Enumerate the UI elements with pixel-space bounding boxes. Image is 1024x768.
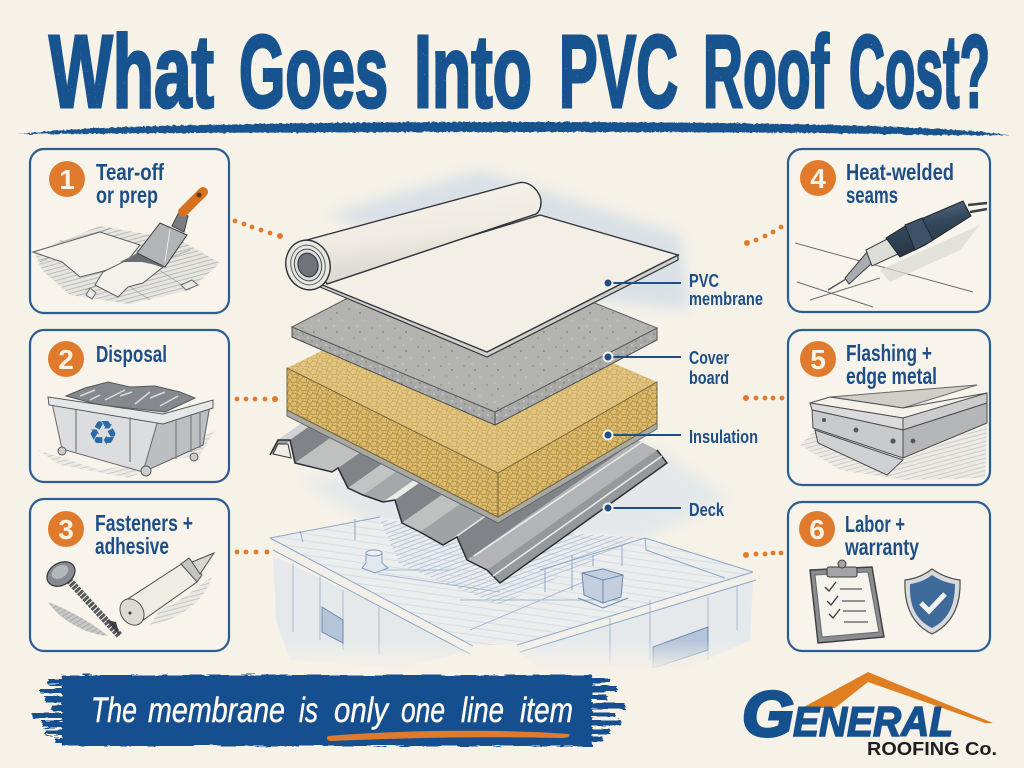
title bbox=[49, 14, 990, 129]
badge 6 bbox=[799, 511, 835, 547]
banner text: one bbox=[401, 691, 445, 730]
heading: Fasteners + bbox=[95, 510, 193, 536]
rooftop vent bbox=[362, 550, 388, 573]
heading: Disposal bbox=[96, 341, 167, 367]
banner text: only bbox=[334, 691, 390, 730]
heading bbox=[95, 510, 193, 559]
banner: key takeaway bbox=[32, 675, 625, 746]
heading bbox=[846, 340, 937, 389]
icon: heat welding gun bbox=[795, 201, 987, 307]
banner text: line bbox=[461, 691, 504, 730]
badge 5 bbox=[800, 341, 836, 377]
badge 2 bbox=[48, 341, 84, 377]
icon: edge metal flashing bbox=[800, 385, 987, 480]
connector dots: card 1 bbox=[233, 219, 283, 239]
orange underline bbox=[327, 731, 569, 741]
logo wordmark: ENERAL bbox=[793, 698, 953, 745]
banner text: membrane bbox=[148, 691, 285, 730]
rooftop building sketch bbox=[260, 517, 770, 672]
panel: 3 fasteners + adhesive bbox=[30, 499, 229, 651]
heading: edge metal bbox=[846, 363, 937, 389]
blue background haze bbox=[300, 170, 730, 540]
callout: PVC membrane: membrane bbox=[689, 288, 763, 309]
title: PVC bbox=[559, 14, 678, 129]
badge 2: 2 bbox=[58, 344, 74, 375]
connector dots: card 5 bbox=[743, 395, 784, 401]
banner text bbox=[91, 691, 573, 730]
heading: Heat-welded bbox=[846, 159, 954, 185]
heading bbox=[844, 511, 919, 560]
title: Roof bbox=[703, 14, 829, 129]
callout: PVC membrane: PVC bbox=[689, 270, 719, 291]
connector dots: card 2 bbox=[235, 396, 278, 402]
heading: adhesive bbox=[95, 533, 169, 559]
logo wordmark: ROOFING Co. bbox=[867, 739, 997, 759]
heading: Labor + bbox=[845, 511, 905, 537]
heading: warranty bbox=[844, 534, 919, 560]
heading bbox=[846, 159, 954, 208]
title: Goes bbox=[239, 14, 388, 129]
icon: dumpster with recycling symbol bbox=[38, 382, 215, 478]
callout: cover board bbox=[604, 347, 729, 388]
logo wordmark: G bbox=[742, 678, 794, 750]
icon: scraper on torn membrane bbox=[33, 192, 220, 304]
icon: dumpster with recycling symbol: ♻ bbox=[88, 414, 118, 454]
panel: 6 labor + warranty bbox=[788, 502, 990, 651]
layer: metal deck bbox=[270, 320, 667, 583]
title: Into bbox=[414, 14, 532, 129]
panel: central roof layer illustration bbox=[260, 170, 770, 672]
panel: 1 tear-off or prep bbox=[30, 149, 229, 313]
panel: 5 flashing + edge metal bbox=[788, 330, 990, 485]
title underline brush stroke bbox=[18, 122, 1010, 135]
badge 3: 3 bbox=[58, 514, 74, 545]
icon: screw and adhesive tube bbox=[42, 553, 214, 636]
badge 4: 4 bbox=[810, 163, 826, 194]
logo: General Roofing Co. bbox=[742, 672, 997, 759]
heading: Flashing + bbox=[846, 340, 932, 366]
heading: or prep bbox=[96, 182, 158, 208]
callout: cover board: Cover bbox=[689, 347, 729, 368]
rooftop HVAC unit bbox=[578, 569, 628, 608]
banner text: The bbox=[91, 691, 137, 730]
heading bbox=[96, 159, 164, 208]
heading: Tear-off bbox=[96, 159, 164, 185]
callout: cover board: board bbox=[689, 367, 729, 388]
callout: PVC membrane bbox=[604, 270, 763, 309]
callout: deck: Deck bbox=[689, 499, 725, 520]
banner text: is bbox=[299, 691, 318, 730]
logo wordmark bbox=[742, 678, 997, 759]
icon: clipboard checklist bbox=[810, 560, 884, 643]
heading: seams bbox=[846, 182, 898, 208]
connector dots: card 4 bbox=[744, 225, 783, 246]
panel: 4 heat-welded seams bbox=[788, 149, 990, 312]
rooftop windows bbox=[322, 607, 708, 668]
icon: warranty shield bbox=[905, 569, 960, 634]
panel: 2 disposal bbox=[30, 330, 229, 482]
badge 6: 6 bbox=[809, 514, 825, 545]
brush background bbox=[32, 675, 625, 746]
badge 1 bbox=[49, 161, 85, 197]
layer: PVC membrane roll bbox=[280, 183, 678, 357]
badge 5: 5 bbox=[810, 344, 826, 375]
logo roof bbox=[802, 672, 993, 723]
callout: deck bbox=[604, 499, 725, 520]
badge 1: 1 bbox=[59, 164, 75, 195]
callout: insulation bbox=[604, 426, 758, 447]
connector dots: card 3 bbox=[235, 550, 269, 554]
badge 4 bbox=[800, 160, 836, 196]
badge 3 bbox=[48, 511, 84, 547]
banner text: item bbox=[520, 691, 573, 730]
connector dots: card 6 bbox=[743, 551, 783, 558]
title: What bbox=[49, 14, 214, 129]
layer: cover board bbox=[292, 245, 657, 425]
layer: insulation bbox=[287, 290, 657, 523]
callout: insulation: Insulation bbox=[689, 426, 758, 447]
